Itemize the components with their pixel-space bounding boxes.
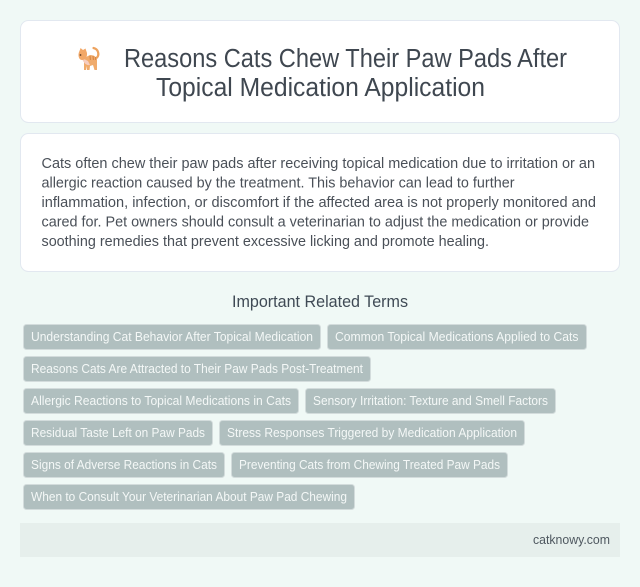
tag [24, 420, 212, 446]
tag [232, 452, 508, 478]
footer [20, 523, 620, 557]
heading: related terms: Important Related Terms [232, 292, 408, 311]
tag: Allergic Reactions to Topical Medications in Cats [31, 393, 291, 408]
icon: cat [78, 48, 98, 70]
tag [328, 324, 586, 350]
panel: term tags [24, 324, 586, 510]
panel: title header [20, 20, 620, 122]
tag: Sensory Irritation: Texture and Smell Factors [313, 393, 548, 408]
description text: cared for. Pet owners should consult a veterinarian to adjust the medication or provide [42, 214, 589, 230]
tag: Residual Taste Left on Paw Pads [31, 425, 205, 440]
description text: inflammation, infection, or discomfort if the affected area is not properly monitored and [42, 194, 596, 211]
tag [24, 484, 354, 510]
tag [306, 388, 556, 414]
tag [24, 356, 370, 382]
tag: Stress Responses Triggered by Medication Application [227, 425, 517, 440]
description text: soothing remedies that prevent excessive licking and promote healing. [42, 233, 489, 250]
tag: When to Consult Your Veterinarian About Paw Pad Chewing [31, 489, 347, 504]
description text: Cats often chew their paw pads after receiving topical medication due to irritation or an [42, 155, 595, 172]
tag: Common Topical Medications Applied to Cats [335, 329, 579, 344]
title text [124, 45, 567, 102]
tag: Understanding Cat Behavior After Topical Medication [31, 329, 313, 344]
tag: Preventing Cats from Chewing Treated Paw Pads [239, 457, 500, 472]
tag [220, 420, 524, 446]
title text: Topical Medication Application [156, 74, 485, 102]
title text: Reasons Cats Chew Their Paw Pads After [124, 45, 567, 73]
description text: allergic reaction caused by the treatment. This behavior can lead to further [42, 174, 514, 192]
footer source text: catknowy.com [533, 532, 610, 547]
tag [24, 388, 298, 414]
panel: description [20, 134, 620, 272]
tag: Signs of Adverse Reactions in Cats [31, 457, 217, 472]
tag [24, 324, 320, 350]
tag [24, 452, 224, 478]
description text [42, 155, 596, 250]
tag: Reasons Cats Are Attracted to Their Paw Pads Post-Treatment [31, 361, 363, 376]
